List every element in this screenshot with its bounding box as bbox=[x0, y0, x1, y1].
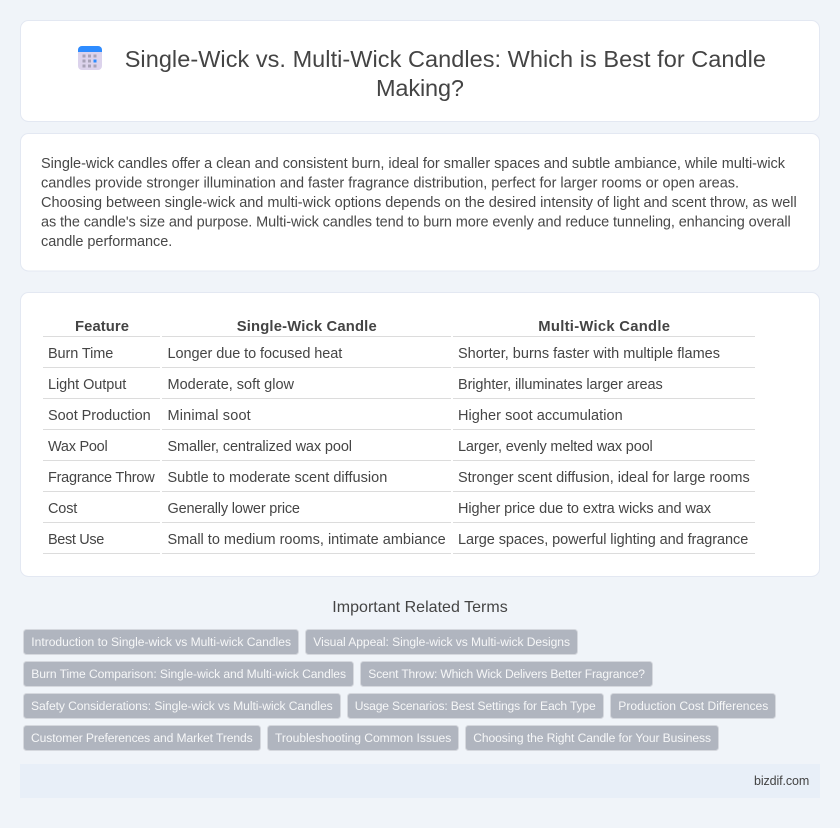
heading: important related terms: Important Related Terms bbox=[332, 599, 508, 616]
tag: usage scenarios: Usage Scenarios: Best Settings for Each Type bbox=[355, 699, 596, 713]
table row: soot production bbox=[43, 408, 755, 430]
table row: light output: Moderate, soft glow bbox=[168, 377, 295, 393]
table row: soot production: Soot Production bbox=[48, 408, 151, 424]
panel: related term tags bbox=[24, 630, 776, 750]
table row: light output: Light Output bbox=[48, 377, 126, 393]
table row: soot production: Minimal soot bbox=[168, 408, 251, 424]
tag: troubleshooting bbox=[268, 726, 458, 750]
tag: customer preferences: Customer Preferences and Market Trends bbox=[31, 731, 253, 745]
footer: bizdif.com bbox=[754, 774, 809, 788]
table row: cost: Generally lower price bbox=[168, 501, 300, 517]
table header row: Multi-Wick Candle bbox=[538, 319, 670, 335]
tag: usage scenarios bbox=[348, 694, 604, 718]
table row: wax pool: Smaller, centralized wax pool bbox=[168, 439, 352, 455]
text block: introduction paragraph: as the candle's size and purpose. Multi-wick candles tend to burn more evenly and reduce tunneling, enhancing overall bbox=[41, 214, 791, 230]
tag: production cost bbox=[610, 694, 776, 718]
tag: scent throw bbox=[360, 662, 652, 686]
table row: best use: Small to medium rooms, intimate ambiance bbox=[168, 532, 446, 548]
table row: cost: Cost bbox=[48, 501, 77, 517]
panel: comparison table bbox=[20, 292, 820, 576]
table row: light output: Brighter, illuminates larger areas bbox=[458, 377, 663, 393]
table row: burn time: Shorter, burns faster with multiple flames bbox=[458, 346, 720, 362]
footer bbox=[20, 764, 820, 798]
table header row bbox=[43, 319, 755, 337]
table row: burn time bbox=[43, 346, 755, 368]
table row: fragrance throw: Stronger scent diffusion, ideal for large rooms bbox=[458, 470, 750, 486]
table row: best use bbox=[43, 532, 755, 554]
table row: soot production: Higher soot accumulation bbox=[458, 408, 623, 424]
table header row: Feature bbox=[75, 319, 129, 335]
tag: safety considerations bbox=[24, 694, 340, 718]
tag: introduction: Introduction to Single-wick vs Multi-wick Candles bbox=[31, 635, 291, 649]
table row: cost bbox=[43, 501, 755, 523]
tag: choosing the right candle bbox=[466, 726, 718, 750]
text block: introduction paragraph: candle performance. bbox=[41, 234, 172, 250]
text block: introduction paragraph: Single-wick candles offer a clean and consistent burn, ideal for smaller spaces and subtle ambiance, while multi-wick bbox=[41, 156, 786, 172]
tag: safety considerations: Safety Considerations: Single-wick vs Multi-wick Candles bbox=[31, 699, 333, 713]
title bbox=[125, 46, 766, 101]
table row: light output bbox=[43, 377, 755, 399]
tag: burn time comparison: Burn Time Comparison: Single-wick and Multi-wick Candles bbox=[31, 667, 346, 681]
table header row: Single-Wick Candle bbox=[237, 319, 377, 335]
table row: cost: Higher price due to extra wicks and wax bbox=[458, 501, 712, 517]
tag: visual appeal: Visual Appeal: Single-wick vs Multi-wick Designs bbox=[313, 635, 570, 649]
tag: production cost: Production Cost Differences bbox=[618, 699, 768, 713]
table row: fragrance throw: Subtle to moderate scent diffusion bbox=[168, 470, 387, 486]
table row: wax pool: Wax Pool bbox=[48, 439, 108, 455]
table row: burn time: Longer due to focused heat bbox=[168, 346, 342, 362]
table row: burn time: Burn Time bbox=[48, 346, 113, 362]
table row: fragrance throw: Fragrance Throw bbox=[48, 470, 155, 486]
table row: best use: Best Use bbox=[48, 532, 104, 548]
icon: calendar bbox=[78, 46, 102, 70]
panel: title header bbox=[20, 20, 820, 122]
title: Single-Wick vs. Multi-Wick Candles: Which is Best for Candle bbox=[125, 46, 766, 72]
title: Making? bbox=[376, 75, 464, 101]
tag: burn time comparison bbox=[24, 662, 354, 686]
text block: introduction paragraph bbox=[41, 156, 797, 250]
tag: customer preferences bbox=[24, 726, 260, 750]
tag: introduction bbox=[24, 630, 298, 654]
table row: fragrance throw bbox=[43, 470, 755, 492]
panel: introduction bbox=[20, 134, 820, 271]
tag: troubleshooting: Troubleshooting Common Issues bbox=[275, 731, 451, 745]
table row: best use: Large spaces, powerful lighting and fragrance bbox=[458, 532, 748, 548]
tag: visual appeal bbox=[306, 630, 578, 654]
table row: wax pool bbox=[43, 439, 755, 461]
text block: introduction paragraph: candles provide stronger illumination and faster fragrance distribution, perfect for larger rooms or open areas. bbox=[41, 176, 739, 192]
tag: choosing the right candle: Choosing the Right Candle for Your Business bbox=[473, 731, 711, 745]
text block: introduction paragraph: Choosing between single-wick and multi-wick options depends on the desired intensity of light and scent throw, as well bbox=[41, 195, 797, 211]
table row: wax pool: Larger, evenly melted wax pool bbox=[458, 439, 653, 455]
tag: scent throw: Scent Throw: Which Wick Delivers Better Fragrance? bbox=[368, 667, 645, 681]
